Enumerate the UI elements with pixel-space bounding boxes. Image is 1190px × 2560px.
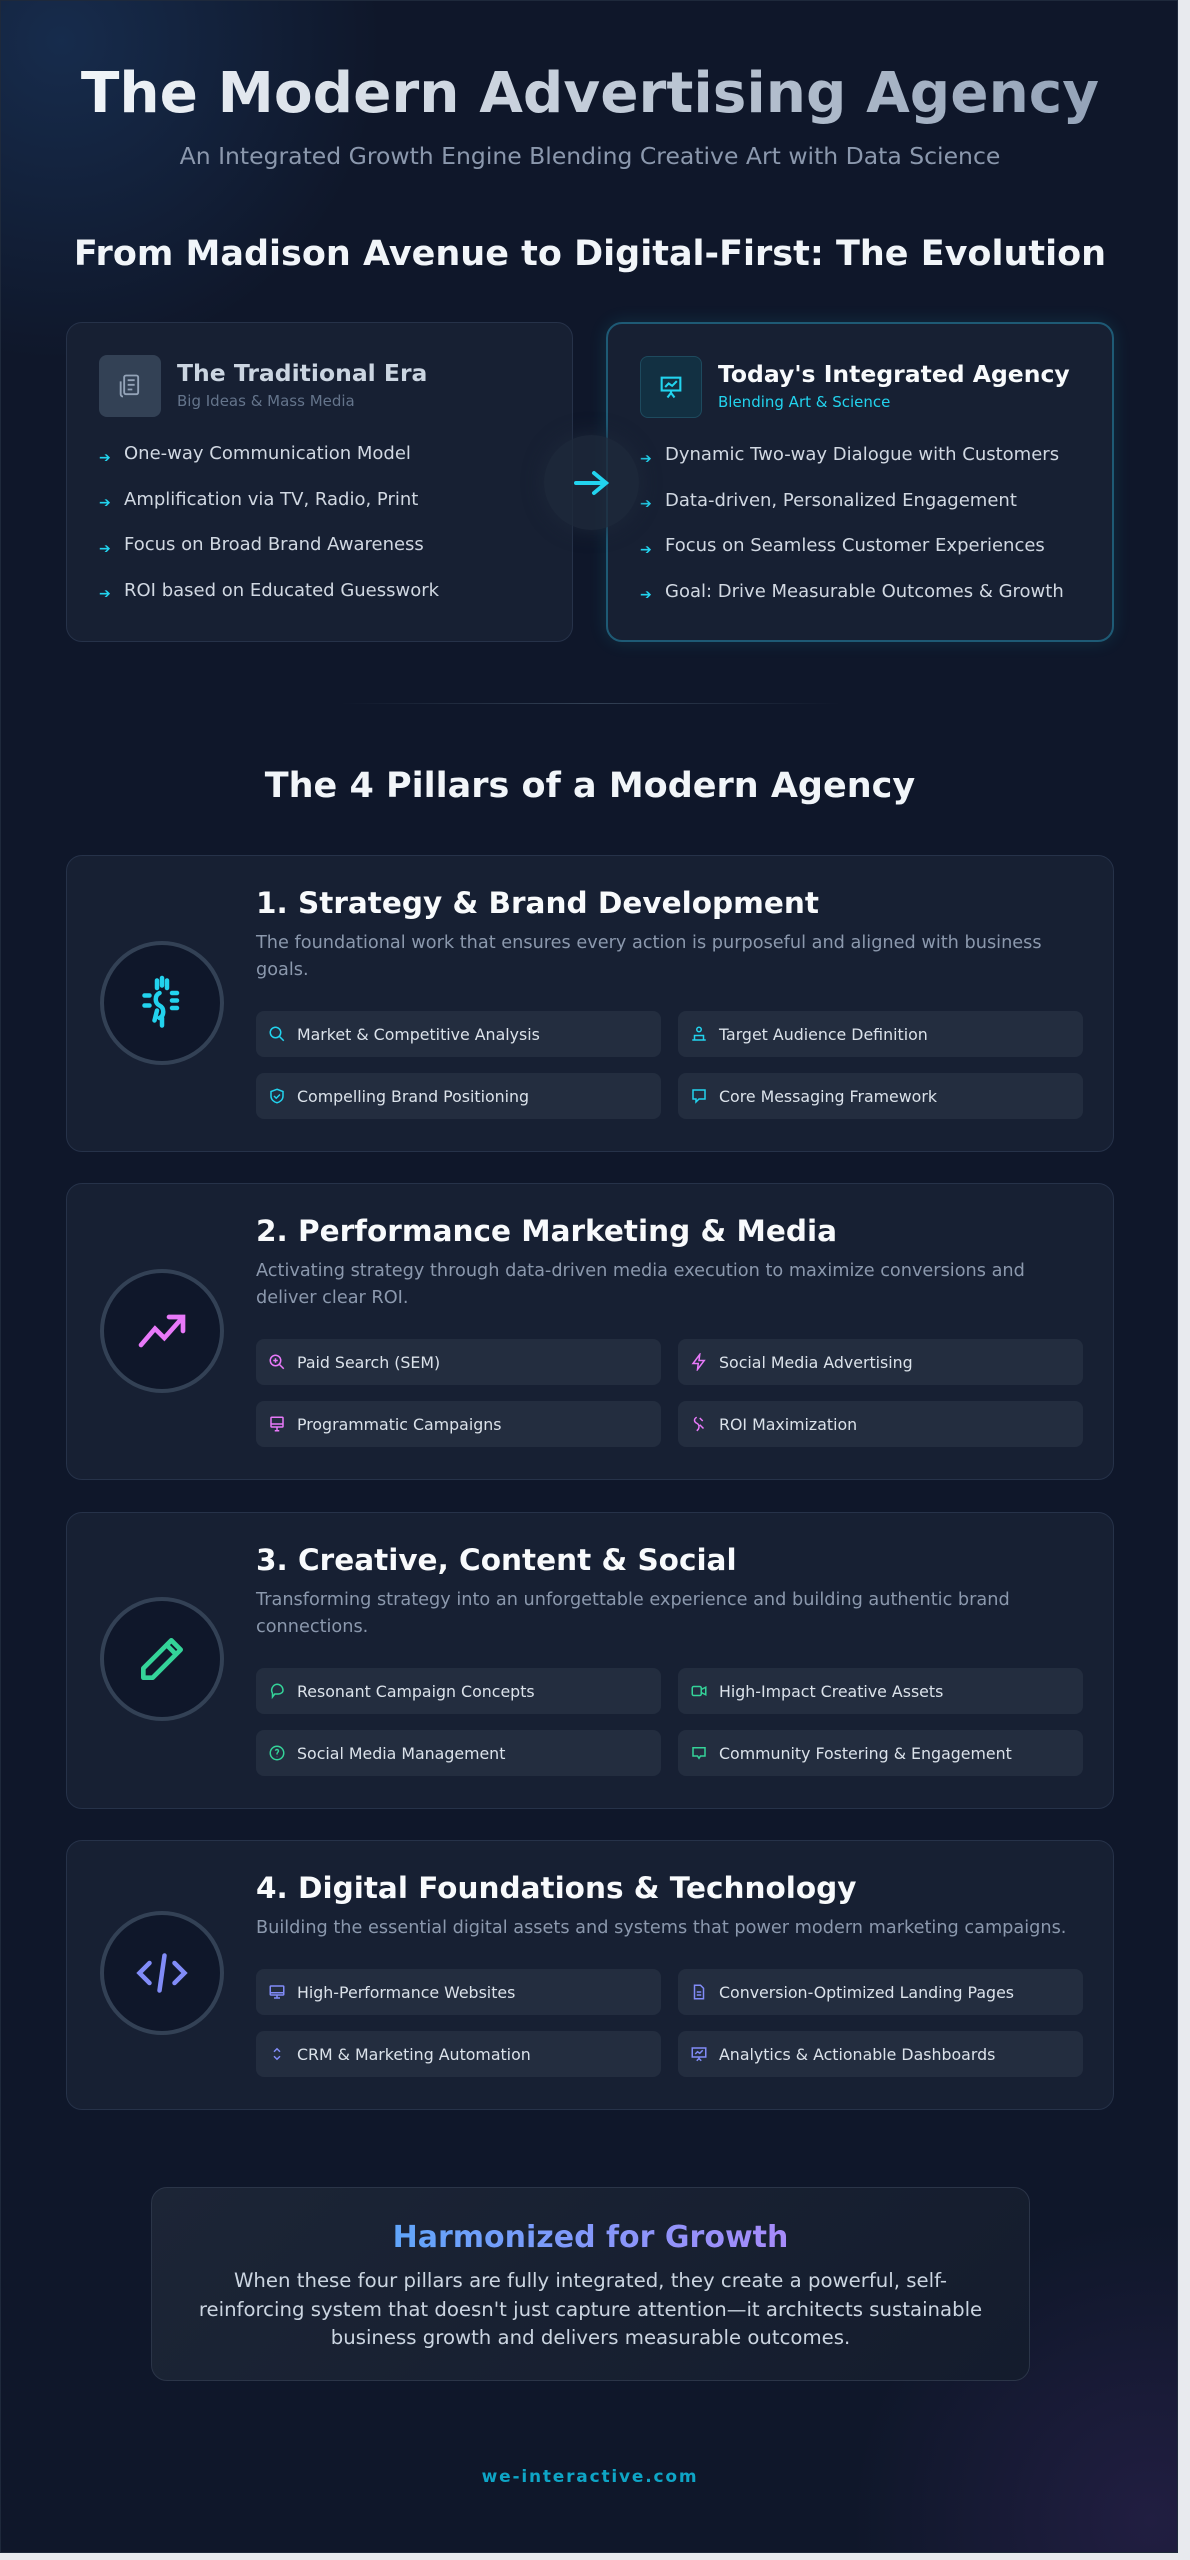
heading: The Traditional Era [177, 359, 427, 387]
heading: 3. Creative, Content & Social [256, 1543, 737, 1577]
icon: presentation chart [640, 356, 702, 418]
bullet list: One-way Communication Model [124, 443, 411, 464]
heading: evolution: From Madison Avenue to Digital-First: The Evolution [74, 234, 1106, 274]
panel: pillar 2 [66, 1183, 1114, 1480]
icon: newspaper [99, 355, 161, 417]
chips: High-Performance Websites [297, 1982, 515, 2002]
chips: Core Messaging Framework [719, 1086, 937, 1106]
chips: Conversion-Optimized Landing Pages [719, 1982, 1014, 2002]
bullet list: Focus on Broad Brand Awareness [124, 534, 424, 555]
bullet list: ➔ [640, 587, 652, 603]
bullet list: ➔ [99, 495, 111, 511]
panel: pillar 3 [66, 1512, 1114, 1809]
chips [256, 1668, 1083, 1776]
heading: 2. Performance Marketing & Media [256, 1214, 837, 1248]
callout text [199, 2269, 982, 2349]
description: Building the essential digital assets and systems that power modern marketing campaigns. [256, 1918, 1066, 1938]
bullet list: Dynamic Two-way Dialogue with Customers [665, 444, 1059, 465]
chips: Community Fostering & Engagement [719, 1744, 1012, 1762]
chips [256, 1969, 1083, 2077]
bullet list: ➔ [99, 586, 111, 602]
title: The Modern Advertising Agency [81, 61, 1099, 126]
chips: Social Media Management [297, 1744, 505, 1762]
chips: Social Media Advertising [719, 1352, 913, 1372]
bullet list: ➔ [99, 541, 111, 557]
chips: Market & Competitive Analysis [297, 1024, 540, 1044]
panel: today's agency [606, 322, 1114, 642]
bullet list: Data-driven, Personalized Engagement [665, 490, 1017, 511]
subheading: Blending Art & Science [718, 393, 890, 411]
panel: traditional era [66, 322, 573, 642]
heading: pillars: The 4 Pillars of a Modern Agency [265, 766, 915, 806]
callout text: reinforcing system that doesn't just capture attention—it architects sustainable [199, 2298, 982, 2320]
bullet list: Amplification via TV, Radio, Print [124, 489, 418, 510]
footer url: we-interactive.com [482, 2467, 698, 2487]
bullet list [640, 444, 1064, 603]
bullet list: ➔ [99, 450, 111, 466]
panel: pillar 1 [66, 855, 1114, 1152]
chips [256, 1011, 1083, 1119]
callout text: business growth and delivers measurable outcomes. [331, 2326, 850, 2349]
bullet list: ➔ [640, 496, 652, 512]
chips: ROI Maximization [719, 1414, 857, 1434]
bullet list: Goal: Drive Measurable Outcomes & Growth [665, 581, 1064, 602]
callout: harmonized for growth [151, 2187, 1030, 2381]
icon: pencil [100, 1597, 224, 1721]
chips: Paid Search (SEM) [297, 1352, 440, 1372]
bullet list: ➔ [640, 451, 652, 467]
arrow: evolution [544, 435, 639, 530]
bullet list [99, 443, 439, 602]
chips: Analytics & Actionable Dashboards [719, 2044, 995, 2064]
bullet list: ROI based on Educated Guesswork [124, 580, 439, 601]
chips [256, 1339, 1083, 1447]
chips: CRM & Marketing Automation [297, 2044, 531, 2064]
chips: Resonant Campaign Concepts [297, 1682, 535, 1700]
icon: code [100, 1911, 224, 2035]
bullet list: ➔ [640, 542, 652, 558]
heading: 1. Strategy & Brand Development [256, 886, 819, 920]
chips: Target Audience Definition [719, 1024, 928, 1044]
description: Transforming strategy into an unforgettable experience and building authentic brand connections. [256, 1590, 1010, 1637]
callout text: When these four pillars are fully integrated, they create a powerful, self- [234, 2269, 947, 2292]
icon: strategy [100, 941, 224, 1065]
icon: trending up [100, 1269, 224, 1393]
subheading: Big Ideas & Mass Media [177, 392, 355, 410]
panel: pillar 4 [66, 1840, 1114, 2110]
subtitle: An Integrated Growth Engine Blending Creative Art with Data Science [180, 142, 1000, 170]
heading: 4. Digital Foundations & Technology [256, 1871, 856, 1905]
chips: Compelling Brand Positioning [297, 1086, 529, 1106]
callout heading: Harmonized for Growth [393, 2220, 788, 2255]
description: The foundational work that ensures every action is purposeful and aligned with business goals. [256, 933, 1042, 980]
chips: High-Impact Creative Assets [719, 1682, 943, 1700]
chips: Programmatic Campaigns [297, 1414, 501, 1434]
heading: Today's Integrated Agency [718, 360, 1070, 388]
bullet list: Focus on Seamless Customer Experiences [665, 535, 1045, 556]
description: Activating strategy through data-driven media execution to maximize conversions and deliver clear ROI. [256, 1261, 1025, 1308]
